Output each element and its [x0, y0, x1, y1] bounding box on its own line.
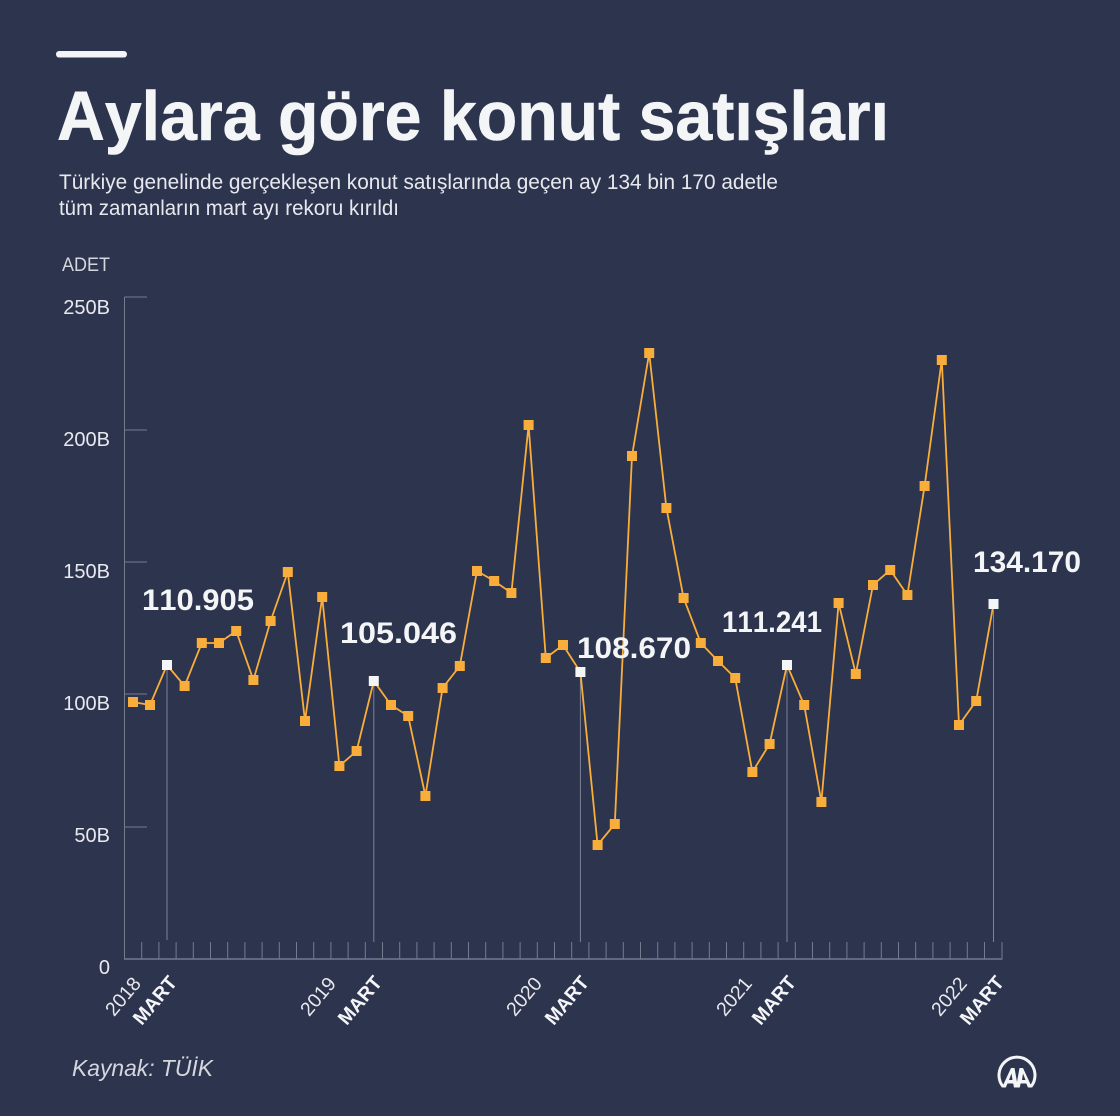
- x axis year labels: [101, 973, 972, 1020]
- x axis march labels: MART: [748, 972, 801, 1029]
- y axis labels: 0: [99, 957, 110, 979]
- y axis unit label: ADET: [62, 255, 110, 276]
- x axis year labels: 2020: [502, 973, 547, 1020]
- y axis labels: [63, 297, 110, 979]
- y axis labels: 200B: [63, 429, 110, 451]
- x axis march labels: MART: [129, 972, 182, 1029]
- march value callouts: 108.670: [577, 632, 691, 665]
- x axis year labels: 2022: [927, 973, 972, 1020]
- y axis labels: 50B: [74, 825, 110, 847]
- x axis year labels: 2021: [712, 973, 757, 1020]
- icon: AA logo: [999, 1057, 1035, 1088]
- line chart: monthly house sales: [128, 348, 998, 850]
- x axis march labels: MART: [956, 972, 1009, 1029]
- title: Aylara göre konut satışları: [57, 77, 889, 155]
- subtitle: [59, 171, 778, 220]
- subtitle: tüm zamanların mart ayı rekoru kırıldı: [59, 197, 399, 220]
- y axis labels: 150B: [63, 561, 110, 583]
- x axis march labels: MART: [541, 972, 594, 1029]
- march value callouts: 110.905: [142, 584, 254, 617]
- march drop lines: [167, 604, 994, 942]
- subtitle: Türkiye genelinde gerçekleşen konut satışlarında geçen ay 134 bin 170 adetle: [59, 171, 778, 194]
- x axis march labels: MART: [334, 972, 387, 1029]
- x axis year labels: 2018: [101, 973, 146, 1020]
- march value callouts: 105.046: [340, 617, 457, 650]
- white march markers: [162, 599, 998, 686]
- x axis year labels: 2019: [296, 973, 341, 1020]
- orange monthly markers: [128, 348, 981, 850]
- y axis labels: 100B: [63, 693, 110, 715]
- x axis march labels: [129, 972, 1009, 1029]
- march value callouts: [142, 546, 1081, 665]
- source: Kaynak: TÜİK: [72, 1055, 215, 1081]
- march value callouts: 134.170: [973, 546, 1081, 579]
- march value callouts: 111.241: [722, 606, 822, 639]
- chart axes and ticks: [124, 297, 1002, 959]
- y axis labels: 250B: [63, 297, 110, 319]
